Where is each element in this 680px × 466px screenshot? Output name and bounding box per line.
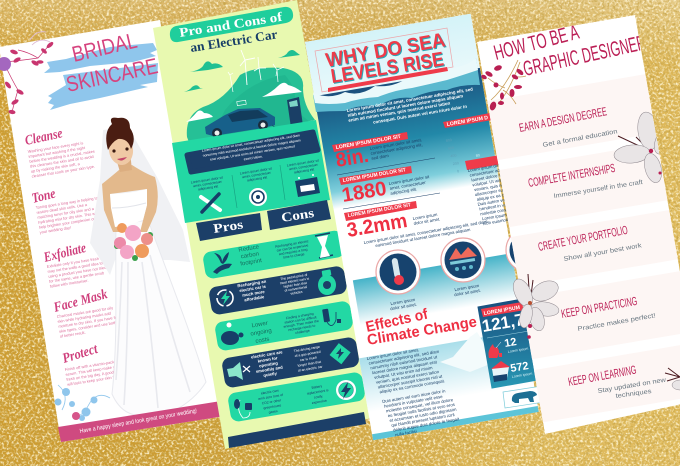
right column text: nibh euismod tin [483,216,515,226]
step: keep on learning: techniques [615,388,653,400]
skin [102,165,158,232]
body paragraphs: qui blandit praesent luptatum zzril [391,412,455,428]
body paragraphs: laoreet dolore magna aliquam erat [372,359,438,375]
icon: wildfire [488,342,502,358]
intro box: erat volutpat. Ut wisi enim ad minim veniam, quis nostrud [210,144,295,162]
row 3: lower ongoing costs: Finding a charging [286,312,314,320]
step: earn a design degree [519,107,618,147]
step: Tone: hydrating mist for dry skin. This will [38,210,98,225]
body paragraphs: molestie consequat, vel illum dolore [385,397,454,414]
row 2: recharging: most electric cars is [279,276,310,285]
step: Cleanse: up by making the skin soft, a [31,161,81,174]
charger [287,97,303,128]
intro box: nonummy nibh euismod tincidunt ut laoreet dolore magna aliquam [202,138,301,158]
row 5: emissions and battery: expensive [311,399,327,405]
row 3: lower ongoing costs: costs [255,337,270,345]
row 5: emissions and battery: costly, [314,394,324,400]
brush strokes behind title [44,43,158,110]
step: Exfoliate: Exfoliate only if you have fresh 5 [46,255,102,269]
row 4: quiet operation: operating [259,360,279,368]
icon captions [389,283,481,311]
footer bar [228,412,366,448]
body paragraphs: delenit augue duis dolore te feugait [393,416,460,433]
icon: gear [249,188,267,206]
row 1: reduce carbon footprint: Recharging an electric [275,239,309,249]
step: Face Mask: moisture to dry skin. If you have fine [58,314,120,329]
bar chart section [443,113,502,175]
intro paragraph: enim ad minim veniam, quis nostrud exerci tation [348,100,451,123]
panel: bridal skincare [0,20,225,442]
icon: charging diamond [330,343,351,364]
intro paragraph: Lorem ipsum dolor sit amet, consectetuer adipiscing elit, sed [346,86,474,113]
step: Tone: restore dead skin cells. Use a [36,202,88,215]
intro box [187,132,318,172]
stat: 8in: 8in. [334,145,370,172]
step: Protect: fresh on the big day. A good glow [66,368,123,382]
row 3: lower ongoing costs [214,300,354,352]
row 4: quiet operation: quietly [263,371,278,378]
step: Face Mask [51,287,122,339]
intro box: exerci tation. [243,154,263,161]
icon: recharge bolt [217,290,233,306]
footer band: Have a happy sleep and look great on your wedding! [79,408,198,435]
icon: flooded house [491,361,510,382]
title [494,26,640,76]
panel: why do sea levels rise [305,14,566,440]
step: earn a design degree: EARN A DESIGN DEGREE [518,104,608,135]
step: Face Mask: Face Mask [51,287,109,316]
icon: mountains [441,238,485,282]
panel: how to be a graphic designer [477,15,680,434]
right column text: laoreet dolore ma [471,172,505,183]
branch with crimson leaves [480,60,526,111]
step: Cleanse: cleanser that cools on your skin type. [31,164,95,179]
icon: piggy bank [221,322,244,345]
icon: hourglass [315,233,333,258]
frame and title [315,28,453,92]
stats card: 12 [503,336,518,350]
tab: Pros [196,213,262,241]
title: HOW TO BE A [491,21,581,65]
flower top right [614,112,662,183]
step: Exfoliate [42,241,108,289]
tab: Cons [267,200,331,230]
row 3: lower ongoing costs: ongoing [250,328,272,338]
head [107,133,135,167]
row 1: reduce carbon footprint: Reduce [238,244,260,254]
row 3: lower ongoing costs: station can be difficult [284,315,317,325]
icon: wrench [201,194,220,212]
step: Exfoliate: Exfoliate [42,241,88,266]
stat: 1880: amet, consectetuer [389,180,427,191]
step: Tone: Tone [30,187,57,207]
row 3: lower ongoing costs: challenge [295,329,310,335]
bear box [503,385,551,408]
row 2: recharging: vehicles [290,290,303,296]
intro paragraph: consequat. Duis autem vel eum iriure dolor in [373,104,468,125]
title: Bridal Skincare [64,28,160,97]
row 1: reduce carbon footprint [202,229,346,280]
frame and title: WHY DO SEA [325,30,448,73]
teal section [172,120,330,223]
bar chart section: 80 [475,153,480,158]
icon: phone plug [322,309,341,326]
waves [313,58,480,112]
icon captions: dolor sit amet. [454,288,481,297]
right column text: Duis autem vel eu [477,196,513,207]
step: Tone [30,187,102,235]
body paragraphs: ullamcorper suscipit lobortis nisl ut [377,373,443,390]
row 4: quiet operation: longer than that [297,360,321,368]
floral corner ornament [0,32,54,115]
body paragraphs: Lorem ipsum dolor sit amet, [366,347,419,361]
row 4: quiet operation [221,336,360,389]
stat: 1880: adipiscing elit. [390,186,417,196]
gown skirt [112,220,206,415]
step: Exfoliate: follow with moisturiser. [50,278,89,289]
column captions: adipiscing elit [247,175,268,182]
step: Protect [61,342,124,387]
column captions: amet, consectetuer [193,180,223,188]
stat: 3.2mm [344,201,441,242]
title pill: Pro and Cons of [178,9,284,40]
stat: 3.2mm: LOREM IPSUM DOLOR SIT [347,202,412,219]
car [205,108,275,136]
icon: eco plug [234,399,252,418]
step: Tone: your wedding day! [39,225,71,235]
step: keep on practicing [561,296,656,331]
row 4: quiet operation: known for [257,355,278,364]
step: complete internships: COMPLETE INTERNSHIPS [527,161,616,190]
icon: bolt circle [336,380,356,400]
column captions [191,158,320,192]
step: Face Mask: Charcoal masks are good for oily [56,305,113,319]
centered text: Lorem ipsum dolor sit amet, consectetuer adipiscing elit, sed diam [363,219,488,245]
column captions: amet, consectetuer [242,171,272,179]
row 2: recharging: Recharging an [237,279,267,288]
step: Cleanse [24,126,97,179]
step: Cleanse: before the wedding is a crucial, makes [29,149,95,164]
tab: Cons: Cons [280,205,315,225]
row 1: reduce carbon footprint: carbon [240,251,260,260]
right column text: volutpat. Ut wisi en [472,176,509,187]
bar chart section: 400 [450,153,457,158]
row 5: emissions and battery: emit zero tons of [258,393,283,401]
body paragraphs: nulla facilisi. [395,428,418,437]
row 3: lower ongoing costs: enough. Then make the [283,319,319,329]
step: keep on learning: Stay updated on new [597,377,667,395]
bodice [110,189,147,227]
row 1: reduce carbon footprint: and requires a long [279,247,308,256]
row 4: quiet operation: electric cars are [251,349,284,360]
subtitle: an Electric Car [189,26,279,55]
row 1: reduce carbon footprint: time to charge [283,252,305,260]
stat: 8in: sed diam [371,153,389,161]
intro paragraph: nibh euismod tincidunt ut laoreet dolore magna aliquam [347,93,464,118]
stats card [478,294,566,388]
blue floral ornament [54,385,110,421]
heading: effects of climate change: Effects of [364,305,430,336]
step: Cleanse: important but washing it the night [28,145,86,159]
row 2: recharging: The petrol price of [280,273,308,281]
panel: pros and cons of an electric car [153,0,372,449]
stat: 8in: consectetuer adipiscing elit, [370,142,423,156]
step: complete internships: Immerse yourself in the craft [553,179,643,200]
bar chart section: LOREM IPSUM D [446,115,489,128]
frame and title: LEVELS RISE [330,49,446,89]
icon: thermometer [376,250,420,294]
stats card: 121,7 [480,310,526,336]
tab: Pros: Pros [212,216,244,236]
right column text: ullamcorper suscipi [474,186,512,197]
row 4: quiet operation: The driving range [293,345,320,353]
row 4: quiet operation: of an electric car [298,365,324,373]
right column text: molestie consequat [480,205,518,216]
row 2: recharging: of conventional [284,285,308,293]
step: earn a design degree: Get a formal education [542,128,619,149]
column captions: Lorem ipsum dolor sit [240,166,272,176]
stat: 3.2mm: dolor sit amet. [413,216,441,226]
step: create your portfolio [538,226,642,261]
icon captions: dolor sit amet. [390,302,417,311]
body paragraphs: aliquip ex ea commodo consequat. [379,378,445,394]
step: Protect: serum. This will keep make your [65,363,121,377]
wind turbines [228,50,284,92]
step: Exfoliate: may not the walls a good idea to [47,260,103,274]
column captions: Lorem ipsum dolor sit [287,158,319,168]
step: keep on learning [568,366,666,398]
footer band [58,401,225,442]
bar chart section: 200 [452,161,459,166]
icon: money bag [318,269,336,295]
step: complete internships [528,164,643,198]
soft bands [487,57,680,422]
row 2: recharging: affordable [244,294,265,302]
body paragraphs: Duis autem vel eum iriure dolor in [382,388,446,404]
heading: effects of climate change: Climate Change [366,313,478,349]
row 2: recharging [208,265,348,316]
row 3: lower ongoing costs: recharge needs to [288,324,316,332]
icon: battery [295,174,320,197]
bar chart section: 0 [457,169,459,174]
stats card: 572 [509,360,530,375]
flower bottom right [665,368,680,390]
body paragraphs: et accumsan et iusto odio dignissim [389,407,457,423]
centered text: euismod tincidunt ut laoreet dolore magna aliquam [375,227,471,248]
step: Face Mask: skin while hydrating masks add [57,311,111,324]
step: Cleanse: Washing your face every night is [27,140,84,154]
stat: 3.2mm: 3.2mm [345,210,409,242]
row 5: emissions and battery [227,371,366,423]
stat: 8in [332,132,435,175]
column captions: adipiscing elit [198,184,219,191]
frame and title: LEVELS RISE [329,48,445,88]
right column text: consectetuer adipi [469,167,504,178]
body paragraphs: hendrerit in vulputate velit esse [384,394,443,409]
stats card: Lorem ipsum [511,372,533,379]
right column text: Lorem ipsum dolor [482,210,518,221]
step: Tone: help brighten your complexion on [39,216,96,230]
veil [90,127,190,275]
step: create your portfolio: Show all your best work [563,242,643,263]
clouds [184,50,300,92]
step: Exfoliate: for the same, use a gentle scrub [49,270,104,284]
flower middle left [509,274,561,339]
stats card: LOREM IPSUM [483,305,520,317]
row 4: quiet operation: car is much [300,355,317,362]
white snow peak [440,332,500,372]
body paragraphs: veniam, quis nostrud exerci tation [375,369,440,385]
step: keep on practicing: Practice makes perfect! [577,312,656,333]
step: Face Mask: of better result. [60,330,86,339]
right column text: Lorem ipsum dolor sit [467,161,509,173]
step: Cleanse: Cleanse [24,126,64,149]
body paragraphs: volutpat. Ut wisi enim ad minim [374,365,433,380]
row 4: quiet operation: of a gas-powered [294,350,321,358]
icon: muted speaker [227,362,250,380]
row 2: recharging: much more [242,289,266,298]
icon captions: Lorem ipsum [454,283,480,292]
row 2: recharging: higher than that [283,281,307,289]
stats card: Lorem ipsum [507,347,529,354]
title: Bridal Skincare: BRIDAL [70,28,139,67]
right column text: veniam, quis nost [474,181,508,192]
step: Tone: matching toner for oily skin and a [37,206,95,220]
icon: third circle [506,228,550,272]
panel backgrounds [305,14,539,440]
row 5: emissions and battery: Battery [311,384,323,390]
column captions: adipiscing elit [294,167,315,174]
row 5: emissions and battery: gases [268,409,278,414]
bouquet [114,223,153,261]
step: Exfoliate: using a product you have not tried [48,265,107,279]
row 5: emissions and battery: CO2 or other [261,398,282,405]
body paragraphs: nonummy nibh euismod tincidunt ut [370,354,438,371]
icon: plant in hand [213,252,232,274]
row 5: emissions and battery: electric cars [261,388,279,395]
step: Protect: Protect [61,342,101,367]
stat: 1880: LOREM IPSUM DOLOR SIT [342,167,407,184]
stat: 1880 [339,166,440,209]
row 5: emissions and battery: greenhouse [263,403,282,410]
stat: 8in: Lorem ipsum dolor sit amet, [369,137,422,151]
right column text: hendrerit in vulput [479,201,514,212]
illustration: bride [90,118,206,415]
step: Protect: Finish off with a vitamin-packed [64,359,119,372]
stat: 3.2mm: Lorem ipsum [412,212,438,221]
row 3: lower ongoing costs: Lower [251,321,268,329]
frame and title: WHY DO SEA [324,29,447,72]
step: Tone: Toning goes a long way in helping to [35,195,98,210]
row 2: recharging: electric car is [239,284,267,293]
step: Cleanse: this cleanses the skin and oil to avoid [30,154,94,169]
row 4: quiet operation: smoothly and [255,365,284,374]
intro box: Lorem ipsum dolor sit amet, consectetuer adipiscing elit, sed diam [202,133,300,153]
body paragraphs: eu feugiat nulla facilisis at vero eros [387,402,455,418]
bar chart section: 800 [445,138,452,143]
row 5: emissions and battery: replacement is [306,388,329,396]
right column text: aliquip ex ea comm [476,191,514,202]
illustration: electric car and landscape [184,50,315,145]
stat: 1880: Lorem ipsum dolor sit [388,174,430,186]
stat: 1880: 1880 [340,178,388,207]
title: Bridal Skincare: SKINCARE [64,53,160,97]
row 1: reduce carbon footprint: car can be expensive [276,243,309,253]
column captions: Lorem ipsum dolor sit [191,175,223,185]
body paragraphs: consectetuer adipiscing elit, sed diam [368,349,440,366]
icon captions: Lorem ipsum [390,297,416,306]
step: Face Mask: skin types, consider and use both [59,320,117,334]
title pill [170,7,293,42]
column captions: amet, consectetuer [289,163,319,171]
row 1: reduce carbon footprint: footprint [240,258,263,268]
bar chart section: 600 [448,146,454,151]
step: Protect: will lasts to keep your skin fresh. [67,373,123,387]
stat: 8in: LOREM IPSUM DOLOR SIT [335,134,402,151]
